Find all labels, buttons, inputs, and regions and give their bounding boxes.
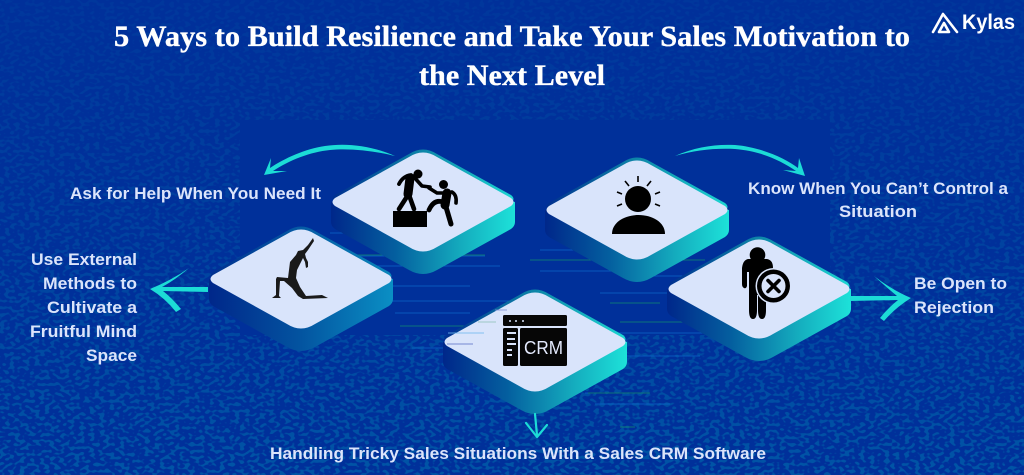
label: Know When: [748, 179, 1009, 221]
arrow: to Be Open: [850, 276, 911, 321]
logo: Kylas: [933, 11, 1015, 34]
label: Use External Methods: Methods to: [43, 274, 137, 293]
label: Use External Methods: Use External: [31, 250, 137, 269]
title: 5 Ways to Build Resilience and Take Your Sales Motivation to: [114, 20, 910, 53]
icon: person with cross: [742, 247, 792, 319]
label: Handling: Handling Tricky Sales Situations With a Sales CRM Software: [270, 444, 766, 463]
title: the Next Level: [419, 59, 605, 92]
arrow: to Handling: [526, 414, 547, 437]
label: Be Open: Be Open to: [914, 274, 1007, 293]
label: Use External Methods: Space: [86, 346, 137, 365]
icon: yoga lunge: [272, 238, 328, 299]
arrow: to Know When: [675, 145, 805, 176]
icon: person with sun rays: [612, 176, 665, 234]
background speed lines: [330, 233, 780, 427]
streaks over CRM diamond: [447, 310, 507, 344]
label: Use External Methods: [30, 250, 138, 365]
label: Know When: Know When You Can’t Control a: [748, 179, 1009, 198]
panel: rejection diamond: [667, 236, 851, 361]
icon: CRM window: [503, 315, 567, 366]
icon: CRM window: CRM: [524, 337, 563, 358]
icon: people helping: [393, 170, 456, 227]
label: Be Open: [914, 274, 1007, 317]
label: Ask for Help: Ask for Help When You Need It: [70, 184, 321, 203]
label: Use External Methods: Fruitful Mind: [30, 322, 137, 341]
logo: Kylas: Kylas: [962, 11, 1015, 34]
label: Know When: Situation: [839, 202, 917, 221]
panel: help diamond: [331, 150, 515, 274]
panel: yoga diamond: [209, 226, 393, 351]
arrow: to Use External: [150, 268, 208, 312]
label: Use External Methods: Cultivate a: [47, 298, 138, 317]
panel: control diamond: [545, 158, 729, 282]
title: [114, 20, 910, 92]
panel: CRM diamond: [443, 290, 627, 414]
label: Be Open: Rejection: [914, 298, 994, 317]
arrow: to Ask for Help: [264, 145, 395, 175]
